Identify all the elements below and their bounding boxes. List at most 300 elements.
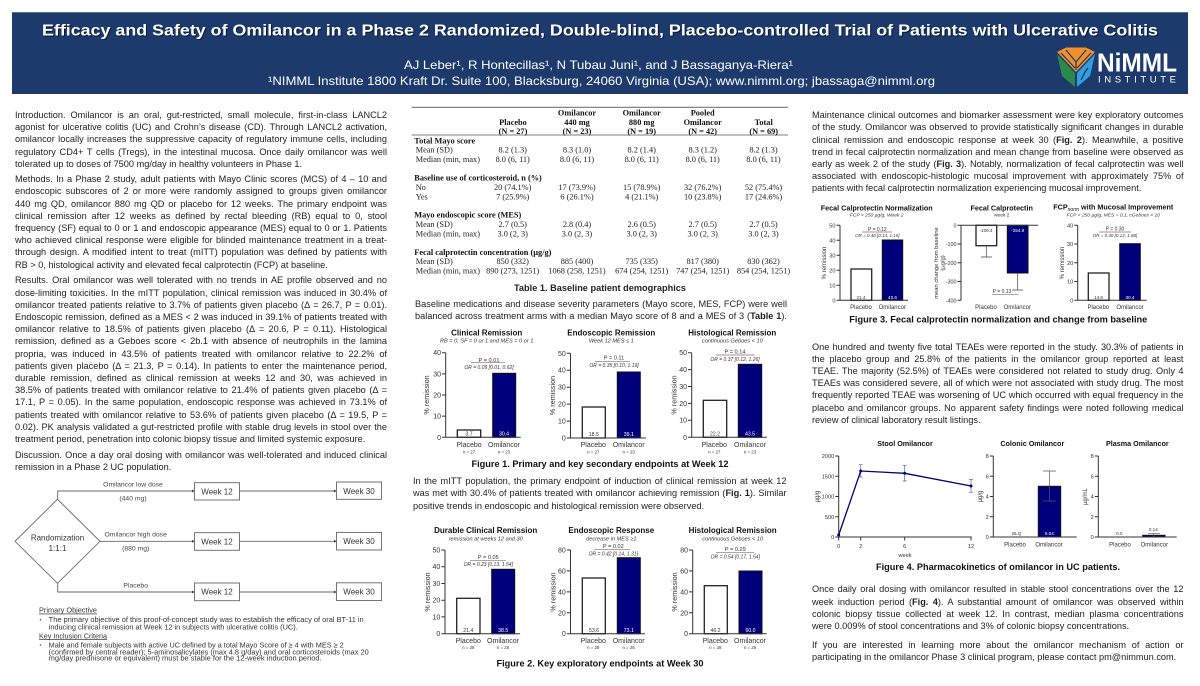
chart: histological remission: OR = 0.37 [0.12, 1.26] [710, 357, 760, 363]
diamond: randomization: Randomization [31, 534, 84, 542]
chart: durable clinical remission: 30 [433, 581, 440, 588]
chart: fecal calprotectin change: -200 [946, 261, 956, 267]
arm: low dose: Week 12 [201, 488, 233, 496]
chart: histological remission week 30: 20 [680, 610, 688, 617]
chart: histological remission: 0 [683, 435, 687, 442]
logo: NiMML Institute [1057, 48, 1177, 87]
table section: corticosteroid use: 4 (21.1%) [625, 192, 659, 201]
primary objective text [39, 608, 364, 631]
figure 1: primary and secondary endpoints [422, 328, 776, 469]
text block: discussion: remission in a Phase 2 UC population. [15, 462, 171, 472]
table section: fecal calprotectin: 830 (362) [747, 257, 780, 266]
table section: Mayo endoscopic score: 3.0 (2, 3) [748, 229, 779, 238]
table section: total Mayo score: 8.0 (6, 11) [686, 155, 720, 164]
text block: safety: placebo and omilancor groups. No apparent safety findings were noted following medical [812, 403, 1184, 413]
text block: maintenance outcomes: patients with fecal calprotectin normalization experiencing mucosal improvement. [812, 183, 1141, 193]
study design flow diagram [14, 482, 382, 663]
table section: corticosteroid use: 52 (75.4%) [745, 183, 782, 192]
chart: durable clinical remission: 10 [433, 614, 440, 621]
table header row: (N = 23) [563, 127, 592, 136]
table section: total Mayo score: 8.3 (1.0) [563, 146, 591, 155]
chart: clinical remission: Omilancor [488, 442, 521, 449]
chart: fecal calprotectin normalization: 20 [829, 268, 836, 274]
chart: endoscopic response: OR = 0.42 [0.14, 1.31] [589, 552, 639, 558]
key inclusion criteria text: Key Inclusion Criteria [39, 633, 107, 640]
table section: total Mayo score: 8.0 (6, 11) [560, 155, 594, 164]
chart: durable clinical remission: % remission [423, 572, 432, 612]
text block: contact [812, 640, 1184, 662]
text block: maintenance outcomes: trend in fecal calprotectin normalization and mean change from baseline were observed as [812, 147, 1184, 157]
chart: histological remission week 30: Placebo [703, 638, 728, 645]
chart: clinical remission: n = 23 [498, 449, 511, 454]
chart: FCP norm with mucosal improvement: 30.4 [1126, 295, 1135, 300]
chart: endoscopic response: % remission [548, 572, 558, 612]
table section: Mayo endoscopic score: 2.8 (0.4) [563, 220, 591, 229]
table header row: (N = 19) [627, 127, 656, 136]
chart: FCP norm with mucosal improvement: 14.8 [1094, 295, 1103, 300]
table section: Mayo endoscopic score: 2.7 (0.5) [689, 220, 717, 229]
table section: corticosteroid use: 6 (26.1%) [560, 192, 594, 201]
chart: colonic omilancor: 8 [986, 454, 989, 460]
text block: results: dose-limiting toxicities. In the mITT population, clinical remission was induced in 30.4% of [15, 288, 387, 298]
chart: colonic omilancor: 6 [986, 474, 989, 480]
text block: maintenance outcomes: of the study. Omilancor was observed to provide statistically significant changes in durable [812, 122, 1184, 132]
chart: stool omilancor line [815, 439, 974, 559]
figure 4 caption: Figure 4. Pharmacokinetics of omilancor in UC patients. [876, 562, 1120, 572]
table section: Mayo endoscopic score [414, 211, 779, 238]
chart: endoscopic response: 60 [558, 568, 566, 575]
text block: introduction: omilancor locally increases the suppressive capacity of regulatory immune cells, including [15, 134, 387, 144]
chart: histological remission: 20 [679, 401, 687, 408]
chart: colonic omilancor: Omilancor [1035, 542, 1063, 548]
chart: fecal calprotectin normalization: 0 [832, 298, 836, 304]
authors: AJ Leber¹, R Hontecillas¹, N Tubau Juni¹, and J Bassaganya-Riera¹ [404, 58, 793, 72]
text block: introduction: tolerated up to doses of 7500 mg/day in healthy volunteers in Phase 1. [15, 159, 302, 169]
chart: stool omilancor line: 6 [903, 544, 906, 550]
chart: fecal calprotectin normalization: % remission [822, 247, 828, 279]
chart: fecal calprotectin change: Fecal Calprotectin [971, 204, 1033, 212]
text block: contact: participating in the omilancor Phase 3 clinical program, please contact pm@nimmun.com. [812, 652, 1176, 662]
chart: histological remission [670, 328, 776, 454]
text block: introduction: regulatory CD4+ T cells (Tregs), in the intestinal mucosa. Once daily omilancor was well [15, 147, 387, 157]
chart: endoscopic remission: n = 27 [587, 449, 600, 454]
table section: fecal calprotectin: 850 (332) [496, 257, 529, 266]
table caption: Table 1. Baseline patient demographics [514, 283, 686, 293]
chart: stool omilancor line: 2 [859, 544, 862, 550]
text block: maintenance outcomes [812, 110, 1184, 193]
chart: clinical remission: 0 [437, 435, 441, 442]
text block: methods: who achieved clinical response were eligible for blinded maintenance treatment in a treat- [15, 235, 387, 245]
text block: methods: RB > 0, histological activity and elevated fecal calprotectin (FCP) at baseline. [15, 260, 328, 270]
chart: histological remission week 30: continuous Geboes < 10 [702, 536, 764, 542]
arm: placebo: Placebo [123, 582, 148, 589]
arm: low dose: Week 30 [343, 487, 375, 496]
chart: endoscopic remission: 40 [558, 368, 566, 375]
arm: low dose: Omilancor low dose [103, 482, 163, 488]
chart: endoscopic response: 0 [562, 631, 566, 638]
chart: durable clinical remission: 21.4 [463, 628, 473, 634]
chart: stool omilancor line: 12 [968, 544, 974, 550]
arm: high dose: Omilancor high dose [105, 532, 167, 539]
chart: FCP norm with mucosal improvement: FCP < 250 µg/g, MES = 0,1, cGeboes < 10 [1067, 212, 1160, 218]
table section: Mayo endoscopic score: 2.6 (0.5) [628, 220, 656, 229]
text block: maintenance outcomes: early as week 2 of the study (Fig. 3). Notably, normalization of fecal calprotectin was well [812, 159, 1184, 169]
chart: FCP norm with mucosal improvement: % remission [1060, 247, 1066, 279]
table section: fecal calprotectin: Mean (SD) [416, 257, 453, 266]
figure 2: exploratory endpoints [423, 526, 777, 668]
chart: stool omilancor line: 500 [825, 515, 834, 521]
chart: fecal calprotectin change [934, 204, 1038, 311]
chart: clinical remission: Placebo [456, 442, 482, 449]
text block: discussion: Discussion. Once a day oral dosing with omilancor was well-tolerated and induced clinical [15, 450, 387, 460]
text block: results: propria, was induced in 43.5% of patients treated with omilancor relative to 22.2% of [15, 349, 387, 359]
chart: fecal calprotectin normalization: OR = 0.40 [0.14, 1.15] [855, 233, 900, 238]
chart: FCP norm with mucosal improvement: 10 [1067, 280, 1073, 286]
chart: endoscopic response: decrease in MES ≥1 [586, 536, 636, 542]
table section: fecal calprotectin: 890 (273, 1251) [486, 266, 540, 275]
chart: plasma omilancor: 4 [1091, 495, 1094, 501]
chart: endoscopic remission: 0 [562, 436, 566, 442]
table section: corticosteroid use: 17 (24.6%) [745, 192, 782, 201]
chart: histological remission: 30 [679, 384, 687, 391]
chart: histological remission: 22.2 [710, 432, 720, 438]
chart: histological remission: 40 [679, 367, 687, 374]
chart: durable clinical remission: P = 0.05 [478, 555, 499, 561]
chart: colonic omilancor: 4 [986, 495, 989, 501]
chart: fecal calprotectin change: -109.4 [979, 228, 993, 233]
chart: fecal calprotectin change: -254.9 [1011, 228, 1025, 233]
arm: high dose [100, 532, 382, 552]
chart: histological remission: n = 23 [744, 449, 757, 454]
text block: discussion [15, 450, 387, 472]
table section: total Mayo score: 8.0 (6, 11) [746, 155, 781, 164]
chart: stool omilancor line: 1000 [822, 495, 834, 501]
chart: durable clinical remission: 38.5 [498, 628, 508, 634]
chart: clinical remission [422, 328, 533, 454]
chart: histological remission: 10 [679, 418, 687, 425]
text block: results: 38.5% of patients treated with omilancor relative to 21.4% of patients given placebo (Δ = [15, 385, 387, 395]
header banner [12, 12, 1188, 94]
chart: fecal calprotectin change: -400 [946, 298, 956, 304]
table section: corticosteroid use: Baseline use of corticosteroid, n (%) [414, 174, 542, 183]
table section: total Mayo score: Total Mayo score [414, 136, 475, 145]
chart: durable clinical remission: remission at weeks 12 and 30 [449, 536, 524, 542]
chart: endoscopic response: P = 0.02 [603, 544, 624, 550]
chart: clinical remission: P = 0.01 [479, 358, 499, 364]
chart: clinical remission: 10 [433, 414, 441, 421]
text block: pharmacokinetics summary: colonic biopsy tissue collected at week 12. In contrast, median plasma concentrations [812, 609, 1184, 619]
chart: fecal calprotectin change: mean change from baseline [934, 227, 940, 299]
chart: histological remission: P = 0.14 [725, 350, 745, 356]
chart: endoscopic remission: Endoscopic Remission [567, 328, 655, 338]
chart: FCP norm with mucosal improvement: 30 [1067, 242, 1073, 248]
arm: low dose: (440 mg) [119, 495, 147, 502]
text block: results: patients given placebo (Δ = 21.3, P = 0.14). In patients to enter the maintenance period, [15, 361, 387, 371]
key inclusion criteria text: (confirmed by central reader); 5-aminosalicylates (max 4.8 g/day) and oral corticosteroids (max 20 [49, 649, 369, 656]
chart: durable clinical remission: Placebo [456, 638, 481, 645]
chart: histological remission: Placebo [702, 442, 727, 449]
chart: stool omilancor line: 0 [837, 544, 840, 550]
arm: low dose [58, 482, 381, 502]
text block: baseline summary [415, 299, 787, 321]
chart: fecal calprotectin normalization: FCP < 250 µg/g, Week 2 [850, 212, 904, 218]
text block: safety: frequently reported TEAE was worsening of UC which occurred with equal frequency in the [812, 390, 1184, 400]
chart: endoscopic remission: 50 [558, 351, 566, 358]
chart: durable clinical remission: 20 [433, 598, 440, 605]
chart: endoscopic remission: OR = 0.35 [0.10, 1.19] [589, 363, 639, 369]
table section: total Mayo score: 8.0 (6, 11) [496, 155, 530, 164]
chart: colonic omilancor: Colonic Omilancor [1000, 439, 1064, 448]
text block: results: 17.1, P = 0.05). In the same population, endoscopic response was achieved in 73.1% of [15, 397, 387, 407]
primary objective text: Primary Objective [39, 608, 97, 615]
table section: Mayo endoscopic score: 2.7 (0.5) [749, 220, 778, 229]
arm: high dose: (880 mg) [122, 545, 149, 552]
chart: fecal calprotectin change: -300 [946, 280, 956, 286]
table header row [499, 109, 778, 136]
text block: results: 0.02). PK analysis validated a gut-restricted profile with stable drug levels in stool over the [15, 422, 387, 432]
table header row: (N = 27) [499, 127, 528, 136]
chart: endoscopic response: n = 28 [587, 645, 600, 650]
logo: NiMML Institute: NiMML [1097, 48, 1177, 78]
text block: pharmacokinetics summary [812, 584, 1184, 631]
text block: introduction [15, 110, 387, 169]
arm: placebo: Week 30 [343, 587, 375, 596]
table section: Mayo endoscopic score: Mayo endoscopic score (MES) [414, 211, 522, 220]
chart: endoscopic response: 20 [558, 610, 566, 617]
chart: FCP norm with mucosal improvement: P = 0.30 [1106, 227, 1125, 233]
chart: fecal calprotectin change: week 2 [994, 212, 1010, 218]
text block: safety: review of clinical laboratory result listings. [812, 415, 981, 425]
primary objective text: inducing clinical remission at Week 12 in subjects with ulcerative colitis (UC). [49, 624, 298, 631]
chart: endoscopic remission: n = 23 [623, 449, 635, 454]
chart: fecal calprotectin change: Omilancor [1004, 305, 1031, 311]
text block: results: Results. Oral omilancor was well tolerated with no trends in AE profile observed and no [15, 275, 387, 285]
chart: fecal calprotectin normalization: P = 0.12 [868, 227, 887, 233]
chart: colonic omilancor [978, 439, 1077, 548]
chart: stool omilancor line: 1500 [822, 474, 834, 480]
chart: clinical remission: RB = 0, SF = 0 or 1 and MES = 0 or 1 [440, 338, 533, 344]
figure 3: fecal calprotectin [821, 202, 1174, 324]
chart: FCP norm with mucosal improvement: Omilancor [1116, 305, 1144, 311]
text block: figure 1 discussion [413, 476, 786, 511]
table section: total Mayo score: Median (min, max) [416, 155, 480, 164]
chart: plasma omilancor: 2 [1091, 515, 1094, 521]
table section: corticosteroid use: 32 (76.2%) [684, 183, 722, 192]
text block: results: omilancor relative to 18.5% of patients given placebo (Δ = 20.6, P = 0.11). Histological [15, 324, 387, 334]
chart: durable clinical remission: 0 [436, 631, 440, 638]
chart: histological remission week 30: P = 0.29 [725, 547, 746, 553]
table section: fecal calprotectin: 854 (254, 1251) [737, 266, 790, 275]
text block: results: Endoscopic remission, defined as a MES < 2 was induced in 39.1% of patients treated with [15, 312, 387, 322]
key inclusion criteria text: mg/day prednisone or equivalent) must be stable for the 12-week induction period. [49, 656, 322, 663]
chart: durable clinical remission [423, 526, 537, 650]
table header row: Omilancor [684, 118, 722, 127]
figure 1 caption: Figure 1. Primary and key secondary endpoints at Week 12 [472, 459, 728, 469]
text block: introduction: Introduction. Omilancor is an oral, gut-restricted, small molecule, first-in-class LANCL2 [15, 110, 387, 120]
text block: maintenance outcomes: Maintenance clinical outcomes and biomarker assessment were key exploratory outcomes [812, 110, 1184, 120]
chart: histological remission week 30: Histological Remission [689, 526, 777, 535]
chart: endoscopic response: Placebo [581, 638, 606, 645]
text block: methods: Methods. In a Phase 2 study, adult patients with Mayo Clinic scores (MCS) of 4 – 10 and [15, 174, 387, 184]
chart: fecal calprotectin change: Placebo [975, 305, 998, 311]
table header row: Omilancor [558, 109, 596, 118]
table section: fecal calprotectin: Median (min, max) [416, 266, 480, 275]
chart: histological remission week 30: 40 [680, 589, 688, 596]
text block: safety: the placebo group and 25.8% of the patients in the omilancor group reported at least [812, 354, 1184, 364]
chart: endoscopic response: 53.6 [589, 628, 599, 634]
chart: durable clinical remission: Omilancor [487, 638, 520, 645]
primary objective text: The primary objective of this proof-of-concept study was to establish the efficacy of oral BT-11 in [49, 617, 364, 624]
text block: methods: through design. A modified intent to treat (mITT) population was defined by patients with [15, 247, 387, 257]
chart: durable clinical remission: 50 [433, 548, 440, 554]
table section: fecal calprotectin: 674 (254, 1251) [615, 266, 669, 275]
text block: figure 1 discussion: positive trends in endoscopic and histological remission were observed. [413, 501, 704, 511]
chart: clinical remission: 20 [433, 392, 441, 400]
table section: total Mayo score: 8.2 (1.4) [628, 146, 656, 155]
chart: plasma omilancor: Plasma Omilancor [1106, 439, 1169, 448]
diamond: randomization [15, 499, 100, 583]
chart: FCP norm with mucosal improvement: FCP [1053, 202, 1068, 212]
table 1: baseline demographics [412, 106, 790, 293]
text block: results [15, 275, 388, 444]
chart: plasma omilancor: 0 [1091, 535, 1094, 541]
title: Efficacy and Safety of Omilancor in a Phase 2 Randomized, Double-blind, Placebo-controlled Trial of Patients with Ulcerative Colitis [42, 22, 1158, 40]
chart: endoscopic response [548, 526, 655, 650]
chart: endoscopic response: 73.1 [624, 628, 634, 634]
chart: colonic omilancor: 2 [986, 515, 989, 521]
chart: endoscopic response: Endoscopic Response [568, 526, 655, 535]
logo: NiMML Institute: INSTITUTE [1098, 74, 1176, 86]
table header row: Placebo [499, 118, 527, 127]
arm: high dose: Week 12 [201, 537, 233, 546]
table section: corticosteroid use: 10 (23.8%) [684, 192, 722, 201]
text block: contact: If you are interested in learning more about the omilancor mechanism of action or [812, 640, 1184, 650]
chart: histological remission week 30: n = 26 [744, 645, 757, 650]
chart: histological remission: 43.5 [745, 432, 755, 438]
chart: colonic omilancor: 0 [986, 535, 989, 541]
chart: endoscopic remission [548, 328, 655, 454]
text block: methods: frequency (SF) equal to 0 or 1 and endoscopic appearance (MES) equal to 0 or 1. Patients [15, 223, 387, 233]
table section: corticosteroid use: 20 (74.1%) [494, 183, 532, 192]
chart: FCP norm with mucosal improvement [1053, 202, 1174, 311]
table section: corticosteroid use: 15 (78.9%) [623, 183, 661, 192]
chart: plasma omilancor: Placebo [1109, 542, 1132, 548]
chart: histological remission: n = 27 [708, 449, 721, 454]
chart: histological remission week 30: 0 [684, 631, 688, 638]
chart: stool omilancor line: week [897, 553, 912, 559]
chart: plasma omilancor: Omilancor [1141, 542, 1168, 548]
table section: Mayo endoscopic score: Mean (SD) [416, 220, 453, 229]
table section: corticosteroid use [414, 174, 782, 201]
chart: plasma omilancor: 0.0 [1116, 531, 1123, 536]
table section: Mayo endoscopic score: 3.0 (2, 3) [687, 229, 718, 238]
chart: endoscopic remission: 18.5 [589, 432, 599, 438]
table section: corticosteroid use: 7 (25.9%) [496, 192, 530, 201]
chart: stool omilancor line: µg/g [815, 491, 821, 502]
table section: corticosteroid use: No [416, 183, 426, 192]
table section: fecal calprotectin: 1068 (258, 1251) [548, 266, 606, 275]
table section: total Mayo score: 8.3 (1.2) [689, 146, 717, 155]
text block: baseline summary: balanced across treatment arms with a median Mayo score of 8 and a MES of 3 (Table 1). [415, 311, 787, 321]
arm: high dose: Week 30 [343, 537, 375, 546]
chart: endoscopic remission: 39.1 [624, 432, 634, 438]
chart: histological remission: Omilancor [734, 442, 767, 449]
chart: histological remission week 30: 60.0 [745, 628, 756, 634]
chart: fecal calprotectin normalization: Placebo [850, 305, 873, 311]
text block: results: patients treated with omilancor relative to 53.6% of patients given placebo (Δ = 19.5, P = [15, 410, 387, 420]
chart: durable clinical remission: n = 28 [462, 645, 475, 650]
table section: corticosteroid use: 17 (73.9%) [558, 183, 596, 192]
chart: FCP norm with mucosal improvement: 0 [1070, 298, 1073, 304]
text block: methods: 440 mg QD, omilancor 880 mg QD or placebo for 12 weeks. The primary endpoint was [15, 199, 387, 209]
table section: total Mayo score: Mean (SD) [416, 146, 453, 155]
chart: plasma omilancor: 8 [1091, 454, 1094, 460]
chart: histological remission week 30: 80 [680, 548, 688, 554]
chart: plasma omilancor: 0.14 [1149, 527, 1158, 532]
chart: fecal calprotectin change: (µg/g) [940, 255, 946, 271]
chart: stool omilancor line: 0 [831, 535, 834, 541]
table section: corticosteroid use: Yes [416, 192, 428, 201]
table header row: 440 mg [564, 118, 591, 127]
chart: durable clinical remission: n = 26 [497, 645, 510, 650]
text block: methods [15, 174, 387, 270]
chart: colonic omilancor: µg/g [978, 491, 984, 502]
chart: clinical remission: 40 [433, 350, 441, 357]
table header row: (N = 69) [749, 127, 778, 136]
chart: fecal calprotectin normalization: Omilancor [879, 305, 906, 311]
chart: durable clinical remission: Durable Clinical Remission [434, 526, 537, 535]
table section: fecal calprotectin: 747 (254, 1251) [676, 266, 730, 275]
chart: colonic omilancor: Placebo [1004, 542, 1027, 548]
chart: clinical remission: Clinical Remission [451, 328, 522, 338]
chart: histological remission: 50 [679, 350, 687, 357]
chart: plasma omilancor: 6 [1091, 474, 1094, 480]
table section: Mayo endoscopic score: Median (min, max) [416, 229, 480, 238]
chart: histological remission: Histological Remission [688, 328, 776, 338]
text block: maintenance outcomes: clinical remission and endoscopic response at week 30 (Fig. 2). Meanwhile, a positive [812, 135, 1183, 145]
chart: endoscopic remission: Placebo [581, 442, 606, 449]
diamond: randomization: 1:1:1 [49, 544, 67, 553]
chart: colonic omilancor: 5.04 [1045, 531, 1054, 536]
text block: safety: TEAE. The majority (52.5%) of TEAEs were considered not related to study drug. Only 4 [812, 366, 1184, 376]
chart: fecal calprotectin normalization [821, 204, 933, 311]
figure 4: pharmacokinetics [814, 439, 1177, 572]
table section: total Mayo score: 8.2 (1.3) [499, 146, 527, 155]
chart: histological remission week 30: n = 28 [709, 645, 722, 650]
chart: plasma omilancor [1083, 439, 1177, 548]
chart: FCP norm with mucosal improvement: Placebo [1087, 305, 1110, 311]
chart: histological remission week 30: % remission [670, 572, 679, 612]
chart: clinical remission: % remission [422, 375, 431, 415]
arm: placebo [58, 582, 381, 601]
chart: FCP norm with mucosal improvement: with Mucosal Improvement [1079, 202, 1174, 212]
table section: Mayo endoscopic score: 2.7 (0.5) [499, 220, 527, 229]
chart: endoscopic remission: % remission [548, 376, 557, 415]
chart: endoscopic response: 40 [558, 589, 566, 596]
chart: durable clinical remission: OR = 0.23 [0.13, 1.54] [464, 562, 514, 568]
table section: total Mayo score: 8.0 (6, 11) [625, 155, 659, 164]
chart: FCP norm with mucosal improvement: OR = 0.40 [0.12, 1.68] [1093, 233, 1138, 238]
table section: Mayo endoscopic score: 3.0 (2, 3) [562, 229, 592, 238]
chart: endoscopic remission: 10 [558, 419, 566, 426]
chart: endoscopic response: n = 26 [623, 645, 635, 650]
chart: endoscopic remission: 20 [558, 402, 566, 409]
text block: figure 1 discussion: was met with 30.4% of patients treated with omilancor achieving remission (Fig. 1). Similar [413, 488, 786, 498]
table section: fecal calprotectin: 735 (335) [625, 257, 658, 266]
text block: baseline summary: Baseline medications and disease severity parameters (Mayo score, MES, FCP) were well [415, 299, 787, 309]
key inclusion criteria text: Male and female subjects with active UC defined by a total Mayo Score of ≥ 4 with MES ≥ 2 [49, 642, 344, 649]
chart: endoscopic remission: P = 0.11 [604, 356, 624, 362]
